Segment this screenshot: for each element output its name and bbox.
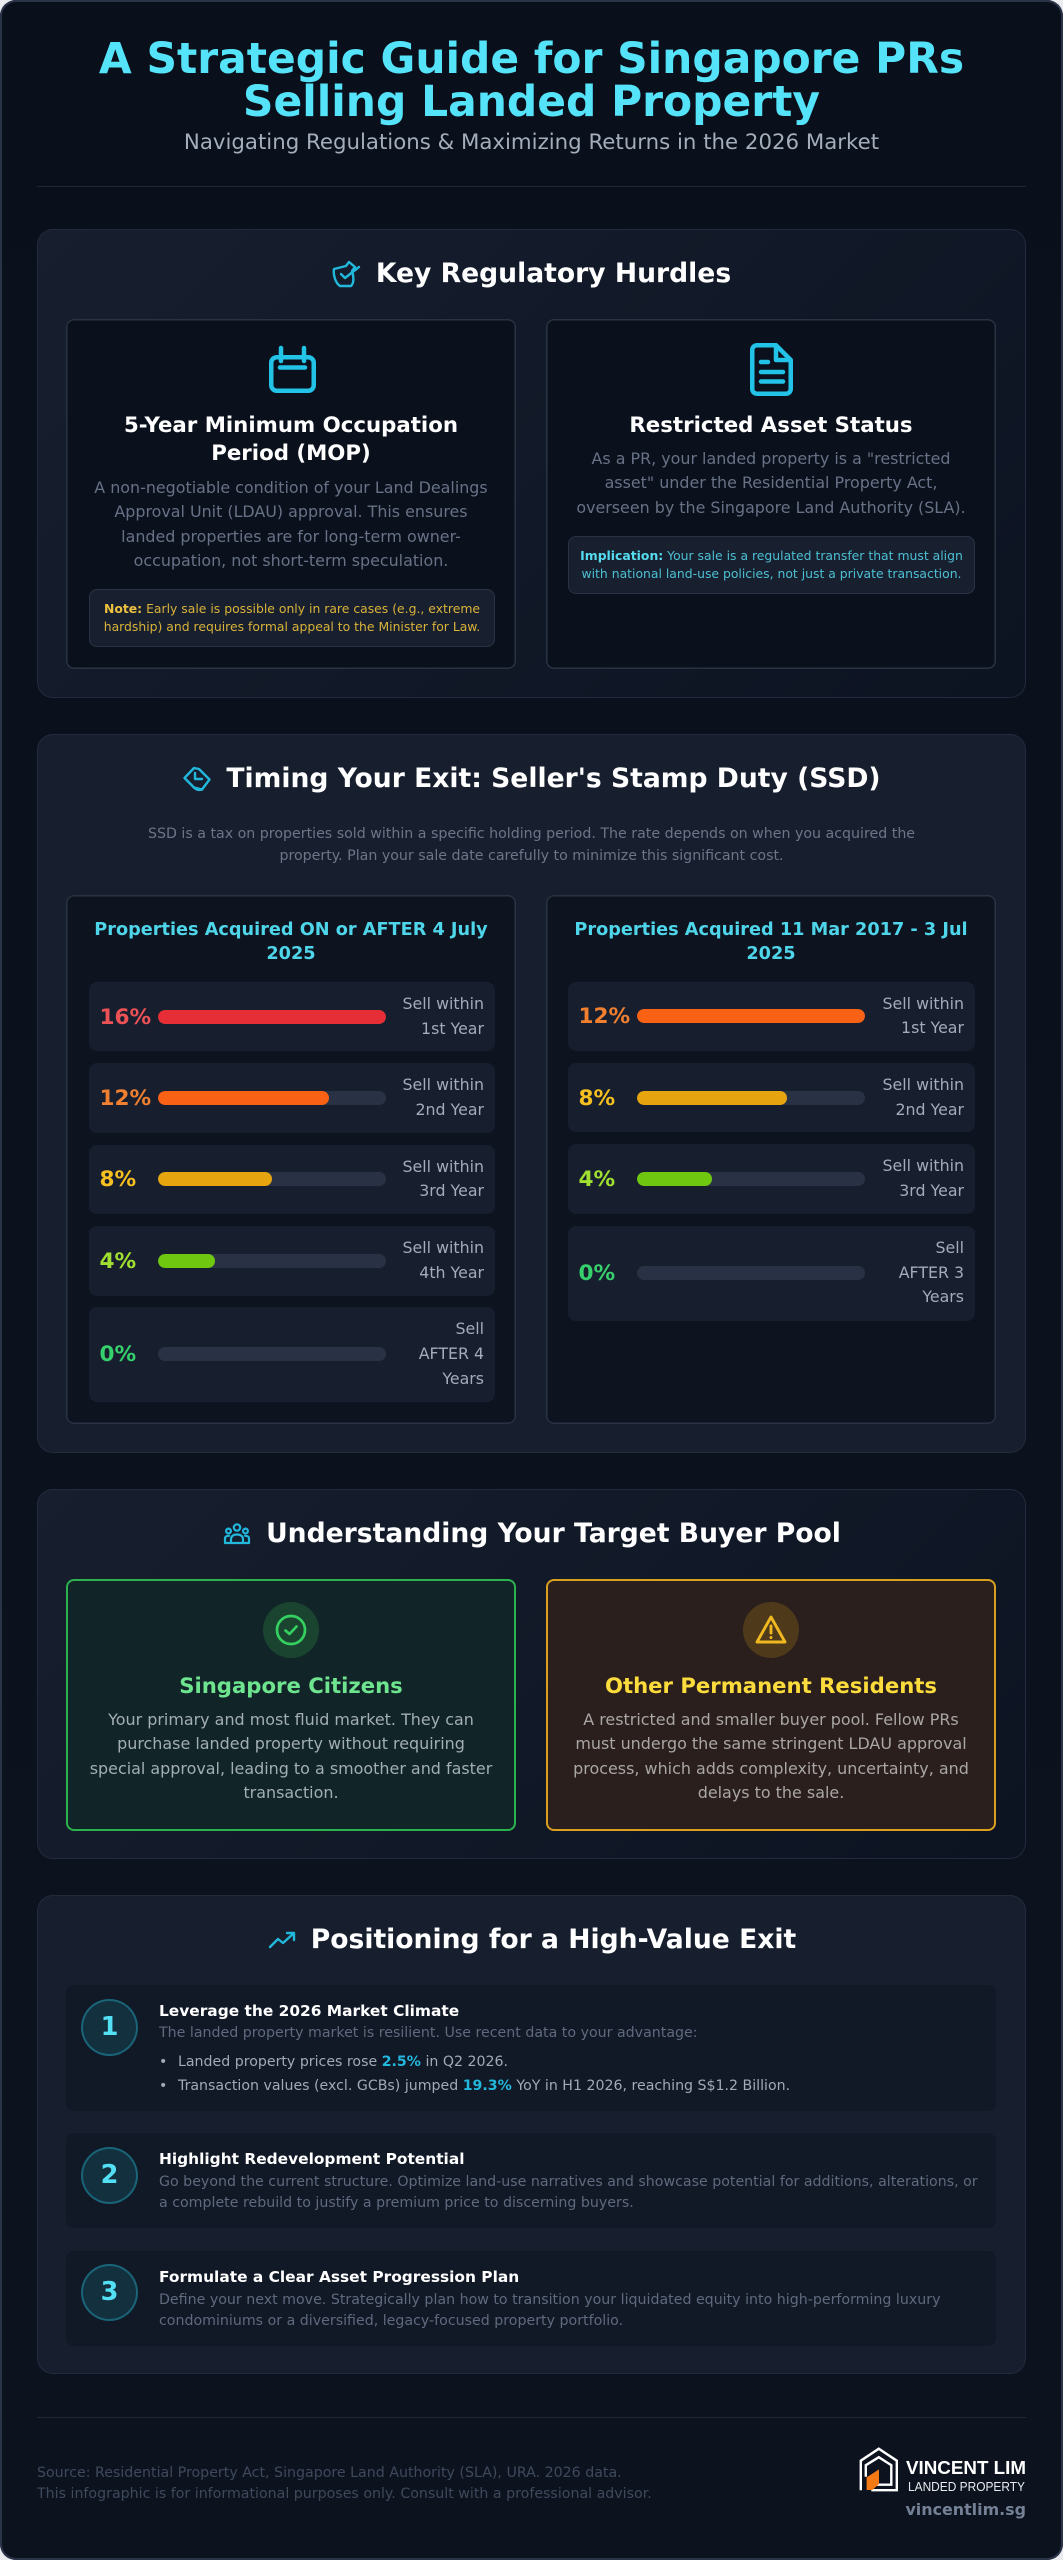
row: 0%: Sell [935, 1238, 964, 1257]
card body: Your primary and most fluid market. They can [108, 1710, 474, 1729]
callout: implication: with national land-use policies, not just a private transaction. [581, 566, 962, 581]
row: 8%: 8% [578, 1086, 615, 1111]
logo: Vincent Lim Landed Property: VINCENT LIM [906, 2457, 1026, 2478]
row: 16%: 16% [100, 1005, 151, 1030]
heading: target buyer pool: Understanding Your Target Buyer Pool [266, 1518, 841, 1549]
row: 12%: Sell within [403, 1075, 484, 1094]
icon: warning triangle [743, 1602, 799, 1658]
panel: high-value exit [37, 1895, 1026, 2374]
callout: implication: Implication: Your sale is a regulated transfer that must align [580, 548, 963, 563]
card body: As a PR, your landed property is a "restricted [592, 449, 950, 468]
card title: 2025 [746, 944, 796, 964]
step title: Leverage the 2026 Market Climate [159, 2002, 459, 2020]
card body: asset" under the Residential Property Act, [605, 473, 937, 492]
card title [124, 413, 458, 466]
row: 12% [568, 982, 975, 1051]
bullet: • [159, 2054, 167, 2070]
card body [576, 449, 966, 517]
card title: Properties Acquired 11 Mar 2017 - 3 Jul [574, 920, 968, 940]
card body: transaction. [243, 1783, 339, 1802]
panel: seller's stamp duty [37, 734, 1026, 1453]
row: 8%: 2nd Year [895, 1100, 964, 1119]
row: 16%: 1st Year [421, 1019, 484, 1038]
card body: overseen by the Singapore Land Authority (SLA). [576, 498, 966, 517]
step description [159, 2174, 978, 2211]
heading: high-value exit: Positioning for a High-Value Exit [311, 1924, 796, 1955]
callout: note: hardship) and requires formal appeal to the Minister for Law. [104, 619, 480, 634]
step description: a complete rebuild to justify a premium price to discerning buyers. [159, 2195, 634, 2211]
number badge 1 [81, 1999, 138, 2056]
row: 8%: Sell within [883, 1075, 964, 1094]
card title: Period (MOP) [211, 441, 371, 466]
row: 16% [89, 982, 495, 1051]
bullet: Landed property prices rose 2.5% in Q2 2026. [178, 2054, 508, 2070]
row: 8%: 8% [100, 1167, 136, 1192]
card: other permanent residents [546, 1579, 996, 1830]
card: singapore citizens [66, 1579, 516, 1830]
card: 5-year MOP [66, 319, 516, 669]
row: 8%: Sell within [403, 1157, 484, 1176]
logo: Vincent Lim Landed Property [860, 2447, 1026, 2494]
row: 12% [89, 1063, 495, 1133]
row: 4%: 4% [578, 1167, 615, 1192]
row: 4%: Sell within [403, 1238, 484, 1257]
card: restricted asset status [546, 319, 996, 669]
row: 4% [568, 1144, 975, 1214]
number badge 2 [81, 2147, 138, 2204]
card body: occupation, not short-term speculation. [134, 551, 448, 570]
panel: target buyer pool [37, 1489, 1026, 1859]
heading: timing your exit: Timing Your Exit: Seller's Stamp Duty (SSD) [226, 763, 881, 794]
number badge 3 [81, 2264, 138, 2321]
row: 12%: Sell within [883, 994, 964, 1013]
number badge 1: 1 [101, 2012, 118, 2042]
number badge 2: 2 [101, 2160, 118, 2190]
bullet: • [159, 2078, 167, 2094]
card: SSD rates 11 Mar 2017 to 3 Jul 2025 [546, 895, 996, 1424]
step description [159, 2292, 940, 2329]
subtitle: Navigating Regulations & Maximizing Returns in the 2026 Market [184, 130, 879, 155]
row: 12%: 2nd Year [415, 1100, 484, 1119]
row: 12%: 12% [578, 1004, 630, 1029]
title: Selling Landed Property [243, 77, 820, 126]
card title: 5-Year Minimum Occupation [124, 413, 458, 438]
step title: Formulate a Clear Asset Progression Plan [159, 2268, 519, 2286]
card body [573, 1710, 969, 1802]
card body [94, 478, 488, 570]
row: 0%: 0% [100, 1342, 136, 1367]
card body: delays to the sale. [698, 1783, 844, 1802]
row: 0%: Sell [455, 1319, 484, 1338]
row: 4%: 3rd Year [899, 1181, 964, 1200]
card body: must undergo the same stringent LDAU approval [575, 1734, 967, 1753]
card title: Singapore Citizens [179, 1673, 403, 1698]
intro text: property. Plan your sale date carefully to minimize this significant cost. [279, 848, 784, 864]
icon: calendar [269, 346, 316, 393]
row: 0% [568, 1226, 975, 1320]
row: 12%: 1st Year [901, 1018, 964, 1037]
card body: landed properties are for long-term owner- [121, 527, 461, 546]
row: 0%: AFTER 3 [899, 1263, 964, 1282]
card: SSD rates on or after 4 July 2025 [66, 895, 516, 1424]
row: 0%: Years [442, 1369, 484, 1388]
card title [94, 920, 488, 964]
row: 8%: 3rd Year [419, 1181, 484, 1200]
intro text [148, 826, 915, 864]
row: 0% [89, 1307, 495, 1402]
row: 4%: Sell within [883, 1156, 964, 1175]
row: 4%: 4% [100, 1249, 136, 1274]
card body: purchase landed property without requiring [117, 1734, 465, 1753]
callout: note: Note: Early sale is possible only in rare cases (e.g., extreme [104, 601, 480, 616]
step 2 [66, 2133, 996, 2228]
row: 0%: Years [922, 1287, 964, 1306]
title: A Strategic Guide for Singapore PRs [99, 34, 964, 83]
row: 12%: 12% [100, 1086, 151, 1111]
website: vincentlim.sg [905, 2500, 1026, 2519]
step 1 [66, 1985, 996, 2111]
number badge 3: 3 [101, 2277, 118, 2307]
card title: Restricted Asset Status [629, 413, 913, 438]
heading: key regulatory hurdles: Key Regulatory Hurdles [376, 258, 731, 289]
card title: 2025 [266, 944, 316, 964]
card body: A non-negotiable condition of your Land Dealings [94, 478, 488, 497]
card title: Properties Acquired ON or AFTER 4 July [94, 920, 488, 940]
row: 8% [568, 1063, 975, 1132]
row: 8% [89, 1145, 495, 1214]
footer source note: Source: Residential Property Act, Singapore Land Authority (SLA), URA. 2026 data. [37, 2465, 622, 2481]
logo: Vincent Lim Landed Property: LANDED PROPERTY [908, 2480, 1026, 2494]
title [99, 34, 964, 126]
step description: Define your next move. Strategically plan how to transition your liquidated equity into high-performing luxury [159, 2292, 940, 2308]
row: 4% [89, 1226, 495, 1296]
panel: key regulatory hurdles [37, 229, 1026, 698]
row: 0%: 0% [578, 1261, 615, 1286]
row: 0%: AFTER 4 [419, 1344, 484, 1363]
bullet: Transaction values (excl. GCBs) jumped 19.3% YoY in H1 2026, reaching S$1.2 Billion. [178, 2078, 790, 2094]
footer source note: This infographic is for informational purposes only. Consult with a professional advisor. [37, 2486, 652, 2502]
intro text: SSD is a tax on properties sold within a specific holding period. The rate depends on when you acquired the [148, 826, 915, 842]
step 3 [66, 2251, 996, 2346]
card body: Approval Unit (LDAU) approval. This ensures [114, 502, 468, 521]
step description: Go beyond the current structure. Optimize land-use narratives and showcase potential for additions, alterations, or [159, 2174, 978, 2190]
card body: special approval, leading to a smoother and faster [90, 1759, 492, 1778]
card title [574, 920, 968, 964]
card body: process, which adds complexity, uncertainty, and [573, 1759, 969, 1778]
card title: Other Permanent Residents [605, 1673, 937, 1698]
icon: document [750, 343, 793, 396]
callout: note [89, 589, 495, 647]
row: 16%: Sell within [403, 994, 484, 1013]
footer source note [37, 2465, 652, 2502]
card body: A restricted and smaller buyer pool. Fellow PRs [583, 1710, 959, 1729]
callout: implication [568, 536, 975, 594]
step description: The landed property market is resilient. Use recent data to your advantage: [159, 2025, 698, 2041]
step description: condominiums or a diversified, legacy-focused property portfolio. [159, 2313, 623, 2329]
icon: check circle [263, 1602, 319, 1658]
card body [90, 1710, 492, 1802]
step title: Highlight Redevelopment Potential [159, 2150, 464, 2168]
row: 4%: 4th Year [419, 1263, 484, 1282]
